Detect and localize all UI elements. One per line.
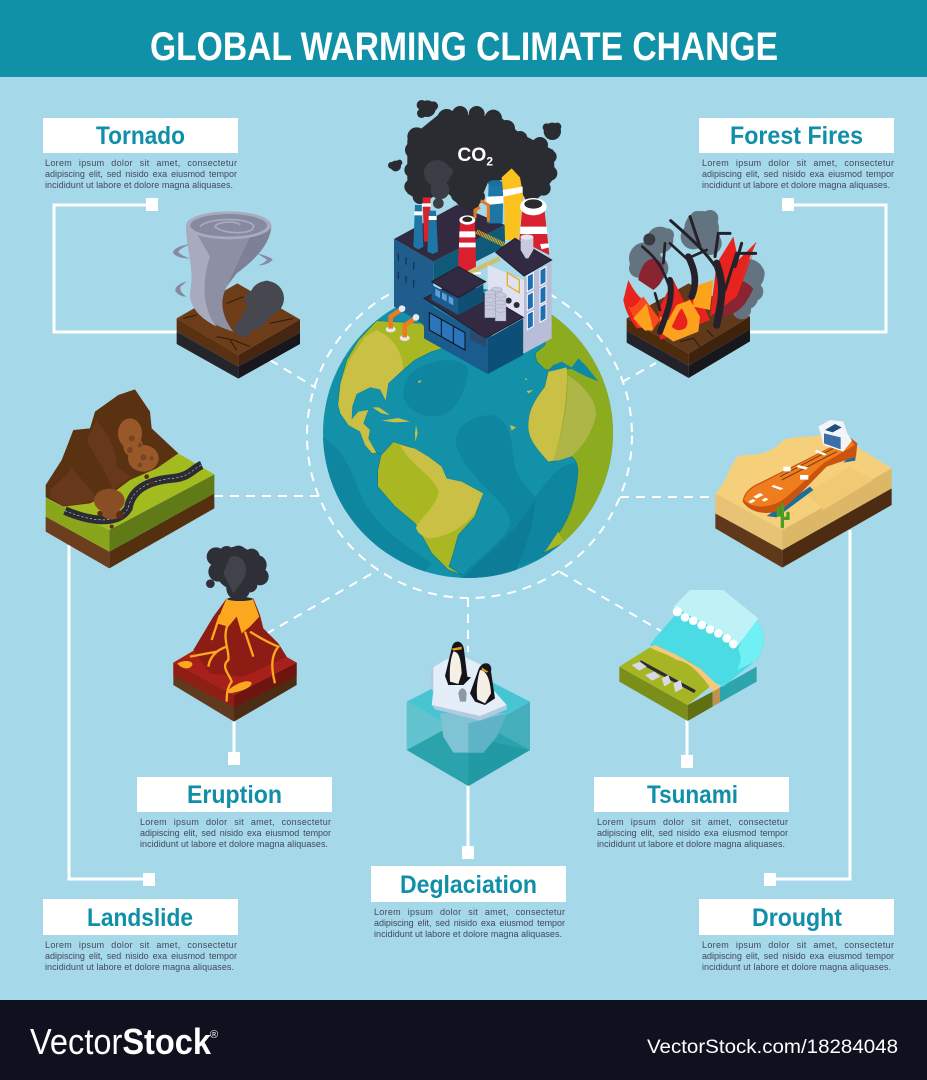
illustration: tornado <box>173 211 300 379</box>
globe <box>322 288 615 583</box>
body text: adipiscing elit, sed nisido exa eiusmod tempor <box>140 828 331 838</box>
body text <box>702 158 894 190</box>
connector: landslide <box>69 545 155 886</box>
land: Mediterranean sea <box>547 358 598 381</box>
caribbean islands <box>372 377 533 442</box>
body text <box>140 817 331 849</box>
heading: Tsunami: Tsunami <box>647 781 738 809</box>
connector: drought <box>764 530 850 886</box>
body text: Lorem ipsum dolor sit amet, consectetur <box>45 940 237 950</box>
CO2 label: 2 <box>486 155 493 169</box>
smoke cloud <box>388 100 561 212</box>
card: Eruption <box>137 777 332 849</box>
footer URL: VectorStock.com/18284048 <box>647 1037 898 1058</box>
body text: adipiscing elit, sed nisido exa eiusmod tempor <box>597 828 788 838</box>
body text: Lorem ipsum dolor sit amet, consectetur <box>702 158 894 168</box>
burnt trees <box>642 217 756 332</box>
illustration: forest fire <box>623 210 765 378</box>
heading: Eruption: Eruption <box>187 781 282 809</box>
connector: tornado <box>54 198 180 332</box>
card: Drought <box>699 899 894 972</box>
orange pipes <box>386 305 419 341</box>
land: Africa and Europe <box>528 313 615 553</box>
road <box>65 465 202 520</box>
yellow ladders <box>468 232 508 273</box>
mountain <box>46 389 178 507</box>
body text: incididunt ut labore et dolore magna aliquases. <box>45 180 233 190</box>
body text: adipiscing elit, sed nisido exa eiusmod tempor <box>374 918 565 928</box>
ship bridge <box>818 420 852 452</box>
body text: incididunt ut labore et dolore magna aliquases. <box>702 180 890 190</box>
body text: Lorem ipsum dolor sit amet, consectetur <box>140 817 331 827</box>
footer band <box>0 1000 927 1080</box>
card: Landslide <box>43 899 238 972</box>
coast <box>619 647 710 705</box>
land: Africa yellow <box>528 367 567 462</box>
VectorStock logo: VectorStock <box>30 1021 212 1062</box>
body text: Lorem ipsum dolor sit amet, consectetur <box>597 817 788 827</box>
rockfall <box>118 418 159 472</box>
flames <box>638 259 753 317</box>
body text: adipiscing elit, sed nisido exa eiusmod tempor <box>45 951 237 961</box>
smoke <box>629 210 765 319</box>
body text: incididunt ut labore et dolore magna aliquases. <box>45 962 234 972</box>
header band <box>0 0 927 77</box>
card: Deglaciation <box>371 866 566 939</box>
illustration: landslide <box>46 389 214 568</box>
heading: Tornado: Tornado <box>96 122 185 150</box>
body text: incididunt ut labore et dolore magna aliquases. <box>597 839 785 849</box>
body text: adipiscing elit, sed nisido exa eiusmod tempor <box>702 169 894 179</box>
body text: adipiscing elit, sed nisido exa eiusmod tempor <box>45 169 237 179</box>
funnel <box>186 225 271 332</box>
silo tanks <box>485 287 506 321</box>
body text: incididunt ut labore et dolore magna aliquases. <box>374 929 562 939</box>
land: South America <box>378 442 483 575</box>
CO2 label: CO <box>457 145 486 166</box>
body text: adipiscing elit, sed nisido exa eiusmod tempor <box>702 951 894 961</box>
card: Forest Fires <box>699 118 894 190</box>
connector: tsunami <box>681 718 693 768</box>
front low building <box>424 267 523 374</box>
body text <box>702 940 894 972</box>
body text: incididunt ut labore et dolore magna aliquases. <box>702 962 891 972</box>
heading: Drought: Drought <box>752 904 843 932</box>
dashed ring around globe <box>307 273 632 598</box>
body text <box>597 817 788 849</box>
dust cloud <box>235 281 284 337</box>
back building <box>394 205 505 330</box>
illustration: tsunami <box>619 590 764 721</box>
cactus <box>778 505 788 527</box>
connector: eruption <box>228 720 240 765</box>
body text <box>374 907 565 939</box>
foam crest <box>673 607 738 648</box>
card: Tornado <box>43 118 238 190</box>
heading: Forest Fires: Forest Fires <box>730 122 863 150</box>
body text: incididunt ut labore et dolore magna aliquases. <box>140 839 328 849</box>
connector: deglaciation <box>462 784 474 859</box>
iceberg under water <box>440 713 507 753</box>
illustration: drought with stranded ship <box>715 420 892 568</box>
ash cloud <box>206 546 269 600</box>
card: Tsunami <box>594 777 789 849</box>
penguins <box>445 642 495 705</box>
land: North America <box>338 321 443 454</box>
dashed spokes <box>214 360 716 652</box>
title: GLOBAL WARMING CLIMATE CHANGE <box>150 25 778 69</box>
illustration: deglaciation <box>407 642 530 786</box>
heading: Deglaciation: Deglaciation <box>400 871 537 899</box>
ice floe <box>431 665 507 721</box>
wave <box>650 599 764 687</box>
body text: Lorem ipsum dolor sit amet, consectetur <box>702 940 894 950</box>
heading: Landslide: Landslide <box>87 904 193 932</box>
chimneys <box>413 168 549 272</box>
roof silo <box>521 234 533 258</box>
volcano cone <box>193 598 287 677</box>
registered mark: ® <box>210 1029 218 1041</box>
body text: Lorem ipsum dolor sit amet, consectetur <box>45 158 237 168</box>
connector: forest fires <box>748 198 886 332</box>
factory with CO2 smoke <box>386 100 561 374</box>
body text <box>45 158 237 190</box>
body text <box>45 940 237 972</box>
body text: Lorem ipsum dolor sit amet, consectetur <box>374 907 565 917</box>
white tower <box>488 238 552 353</box>
ship hull <box>767 450 856 517</box>
illustration: volcano <box>173 546 297 722</box>
